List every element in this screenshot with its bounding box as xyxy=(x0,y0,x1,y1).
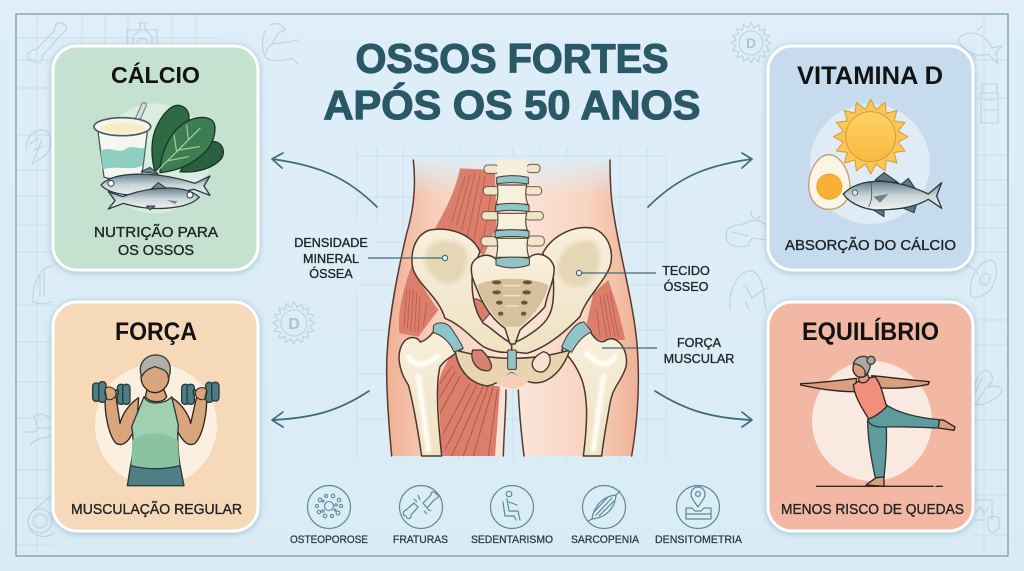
arms xyxy=(801,378,857,392)
caption: calcio xyxy=(94,224,218,259)
femur left xyxy=(399,325,463,456)
icon: weight plate xyxy=(28,495,54,536)
heading: forca: FORÇA xyxy=(115,318,197,346)
item: sarcopenia xyxy=(571,486,639,546)
femur right xyxy=(562,327,627,456)
fish xyxy=(873,173,917,217)
cup xyxy=(98,132,147,179)
arms xyxy=(105,395,139,445)
muscle: right hip xyxy=(587,280,625,340)
item: fraturas xyxy=(393,486,448,546)
hip cartilage left xyxy=(433,323,463,352)
pubis xyxy=(455,350,570,386)
label: tecido osseo: TECIDO xyxy=(662,264,710,278)
hip cartilage right xyxy=(562,322,592,352)
panel: forca xyxy=(53,302,258,531)
heading: calcio: CÁLCIO xyxy=(111,61,200,88)
icon: sun D left center xyxy=(273,302,315,344)
title: OSSOS FORTES xyxy=(356,36,668,82)
arrow: center to calcio xyxy=(272,153,377,207)
title: APÓS OS 50 ANOS xyxy=(324,82,700,128)
heading: vitamina d: VITAMINA D xyxy=(797,62,943,90)
caption: calcio: OS OSSOS xyxy=(118,243,194,259)
arrow: center to vitamina d xyxy=(648,153,752,207)
icon: leaf right xyxy=(974,370,1002,405)
illustration: woman balancing on one leg xyxy=(801,356,955,486)
muscle: center pelvic xyxy=(470,299,490,327)
item: osteoporose xyxy=(290,486,368,546)
ilium left xyxy=(412,229,512,352)
muscle: inner thigh xyxy=(438,355,500,456)
icon: sun D top: D xyxy=(746,35,756,51)
caption: equilibrio: MENOS RISCO DE QUEDAS xyxy=(781,502,964,518)
arrow: center to forca xyxy=(272,391,369,427)
label: densidade mineral ossea xyxy=(294,236,448,281)
icon: flask xyxy=(127,23,157,46)
icon: sun D left center: D xyxy=(288,316,300,333)
icon: arm lower left xyxy=(24,414,52,445)
torso xyxy=(853,377,887,419)
skin xyxy=(387,160,638,456)
neck and head xyxy=(145,388,167,402)
icon: jar xyxy=(981,84,998,123)
item: sarcopenia: SARCOPENIA xyxy=(571,534,639,546)
fish 1 xyxy=(101,174,210,196)
shorts xyxy=(127,465,184,486)
icon: leaf left xyxy=(26,130,51,164)
title xyxy=(324,36,700,128)
head xyxy=(859,372,869,383)
spoon xyxy=(134,105,144,127)
item: fraturas: FRATURAS xyxy=(393,534,448,546)
bottom glossary row xyxy=(290,486,742,546)
panel: vitamina d xyxy=(768,46,973,270)
fish 2 xyxy=(108,188,199,209)
icon: cheese xyxy=(726,210,767,247)
spine xyxy=(481,164,544,246)
ilium right xyxy=(512,228,611,353)
torso xyxy=(131,397,180,469)
heading: equilibrio: EQUILÍBRIO xyxy=(802,317,939,346)
label: tecido osseo: ÓSSEO xyxy=(664,279,709,294)
label: forca muscular: FORÇA xyxy=(677,336,722,350)
muscle: left hip xyxy=(399,265,438,337)
arrow: center to equilibrio xyxy=(655,391,752,427)
icon: fish top right xyxy=(958,26,1002,64)
item: sedentarismo: SEDENTARISMO xyxy=(471,534,553,546)
label: densidade mineral ossea: MINERAL xyxy=(303,252,359,266)
item: sedentarismo xyxy=(471,486,553,546)
icon: nuts xyxy=(952,260,996,298)
label: forca muscular xyxy=(602,336,734,366)
pubic symphysis xyxy=(508,350,516,369)
icon: flexed arm xyxy=(263,24,298,64)
illustration: yogurt, spinach and sardines xyxy=(94,103,223,213)
panel: calcio xyxy=(53,46,258,270)
icon: sun D top xyxy=(731,23,771,63)
item: osteoporose: OSTEOPOROSE xyxy=(290,534,368,546)
label: forca muscular: MUSCULAR xyxy=(664,352,734,366)
ground line xyxy=(817,484,942,488)
label: densidade mineral ossea: ÓSSEA xyxy=(309,266,353,281)
icon: bone xyxy=(27,22,66,63)
right dumbbell xyxy=(182,382,219,404)
illustration: sun, egg and fish xyxy=(809,99,942,224)
illustration: woman lifting dumbbells xyxy=(93,355,219,486)
sun xyxy=(833,99,908,174)
left dumbbell xyxy=(93,382,130,404)
feet xyxy=(866,477,884,486)
item: densitometria: DENSITOMETRIA xyxy=(655,534,742,546)
item: densitometria xyxy=(655,486,742,546)
icon: knee xyxy=(730,271,766,310)
icon: shield monitor xyxy=(974,500,992,520)
egg xyxy=(809,155,850,209)
label: densidade mineral ossea: DENSIDADE xyxy=(294,236,368,250)
icon: muscle left xyxy=(33,266,52,304)
chart: pelvis anatomy xyxy=(387,157,638,456)
caption: calcio: NUTRIÇÃO PARA xyxy=(94,224,218,241)
label: tecido osseo xyxy=(576,264,710,294)
sacrum xyxy=(471,254,554,344)
legs xyxy=(868,420,887,478)
spinach xyxy=(152,105,189,172)
caption: vitamina d: ABSORÇÃO DO CÁLCIO xyxy=(785,237,956,254)
panel: equilibrio xyxy=(768,302,973,531)
muscle: psoas xyxy=(435,168,497,257)
caption: forca: MUSCULAÇÃO REGULAR xyxy=(71,501,242,518)
